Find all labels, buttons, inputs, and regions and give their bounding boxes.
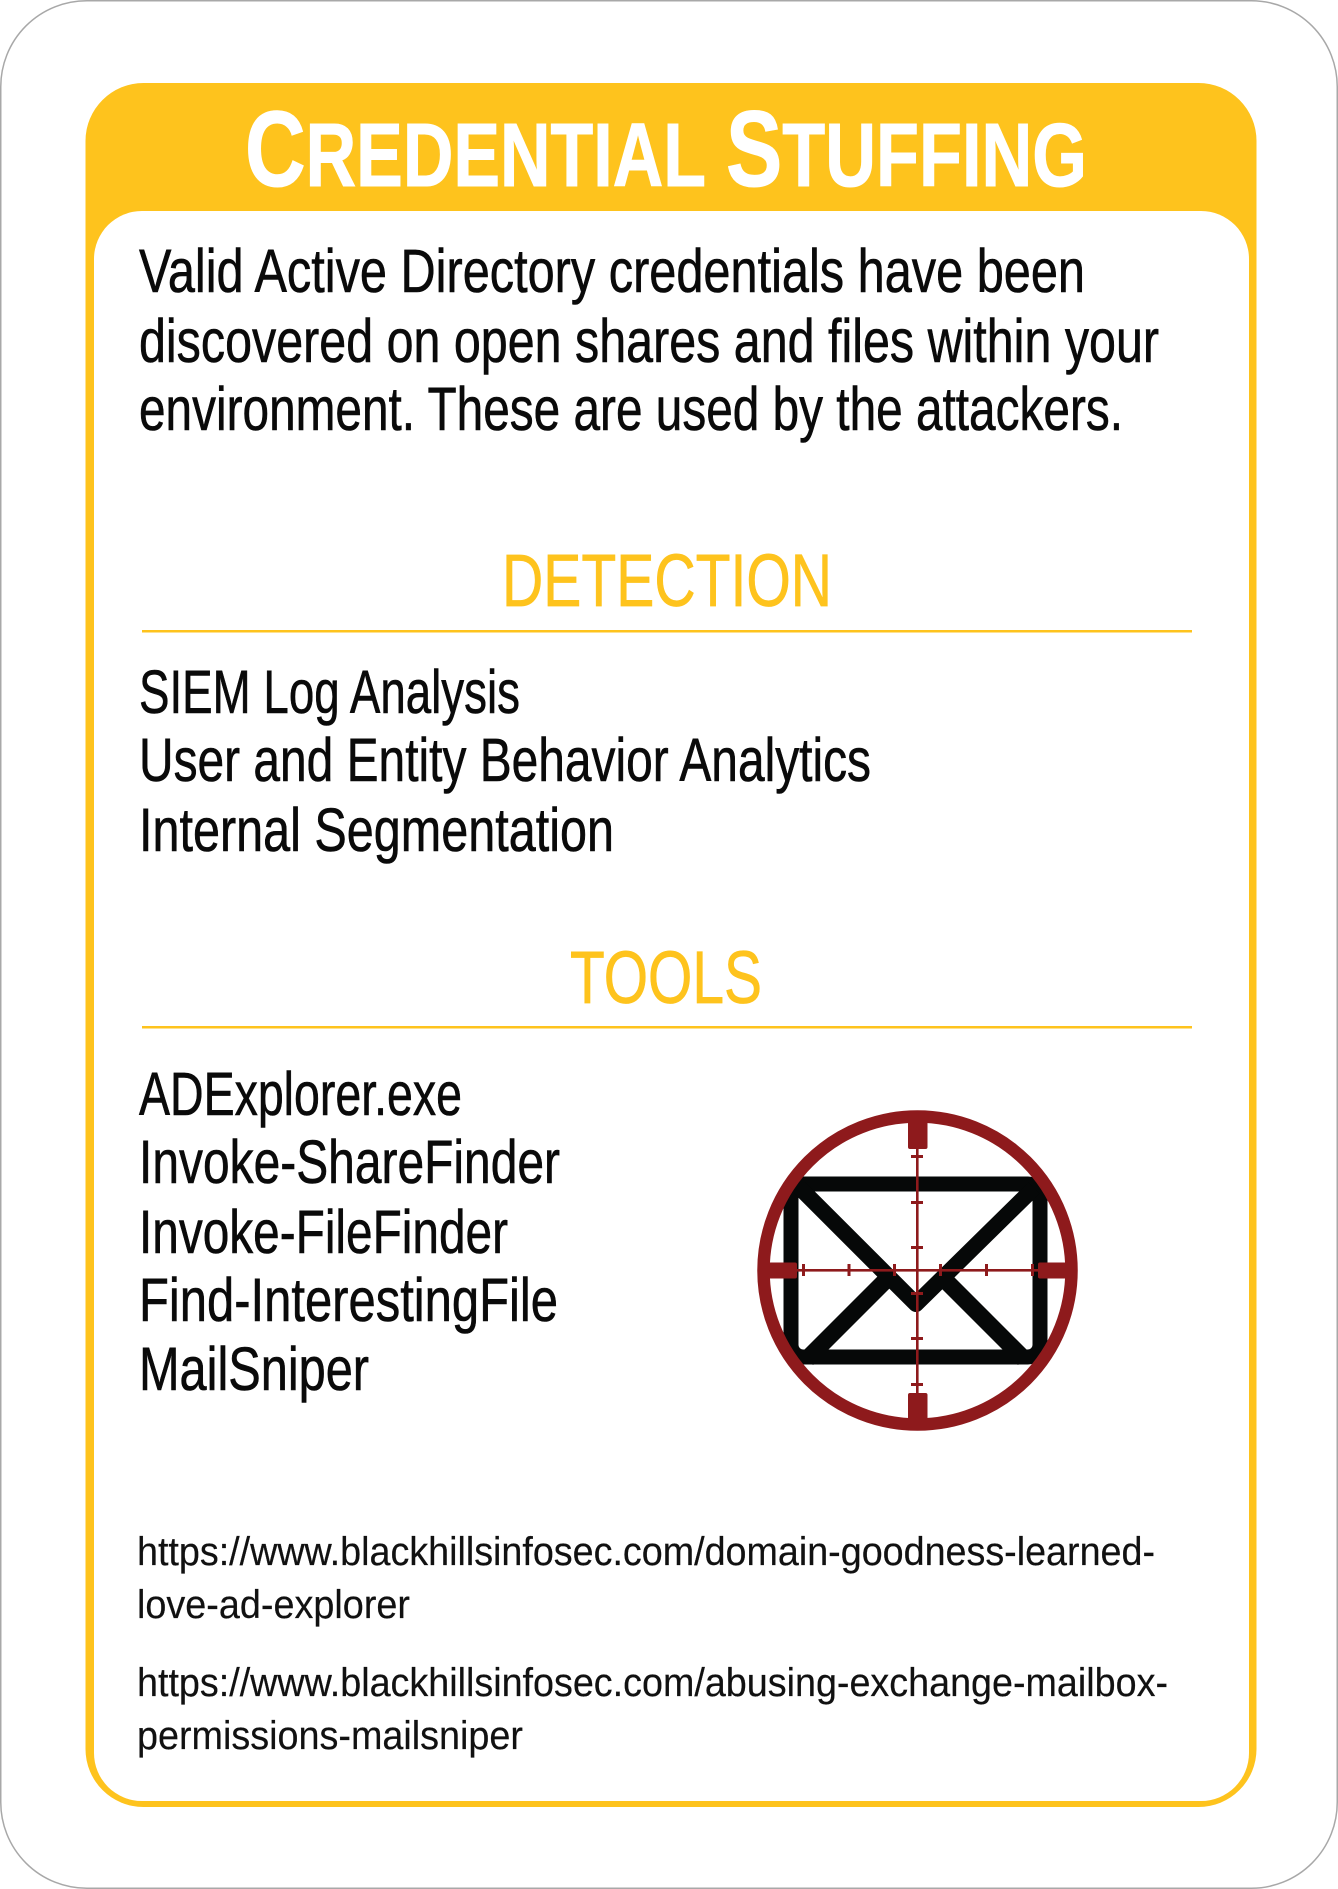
- tools list: Find-InterestingFile: [139, 1266, 558, 1334]
- title: CREDENTIAL: [245, 88, 706, 209]
- reference links: permissions-mailsniper: [137, 1714, 523, 1758]
- detection list: Internal Segmentation: [139, 796, 614, 864]
- reference links: love-ad-explorer: [137, 1583, 410, 1627]
- detection list: User and Entity Behavior Analytics: [139, 726, 871, 794]
- heading: tools: TOOLS: [570, 936, 762, 1019]
- icon: envelope in crosshair: [760, 1112, 1075, 1430]
- detection list: [139, 658, 871, 864]
- reference links: https://www.blackhillsinfosec.com/abusing-exchange-mailbox-: [137, 1661, 1168, 1705]
- tools list: Invoke-ShareFinder: [139, 1128, 560, 1196]
- title: STUFFING: [726, 88, 1087, 209]
- white content area: [94, 211, 1249, 1801]
- description text: Valid Active Directory credentials have been: [139, 237, 1085, 305]
- yellow frame: [86, 83, 1256, 1807]
- heading: detection: DETECTION: [502, 539, 832, 622]
- tools list: Invoke-FileFinder: [139, 1198, 508, 1266]
- tools list: MailSniper: [139, 1335, 369, 1403]
- reference links: [137, 1530, 1168, 1758]
- description text: [139, 237, 1159, 443]
- panel: card frame: [86, 83, 1256, 1807]
- tools list: ADExplorer.exe: [139, 1060, 462, 1128]
- detection list: SIEM Log Analysis: [139, 658, 520, 726]
- reference links: https://www.blackhillsinfosec.com/domain-goodness-learned-: [137, 1530, 1155, 1574]
- title: [245, 88, 1087, 209]
- tools list: [139, 1060, 560, 1403]
